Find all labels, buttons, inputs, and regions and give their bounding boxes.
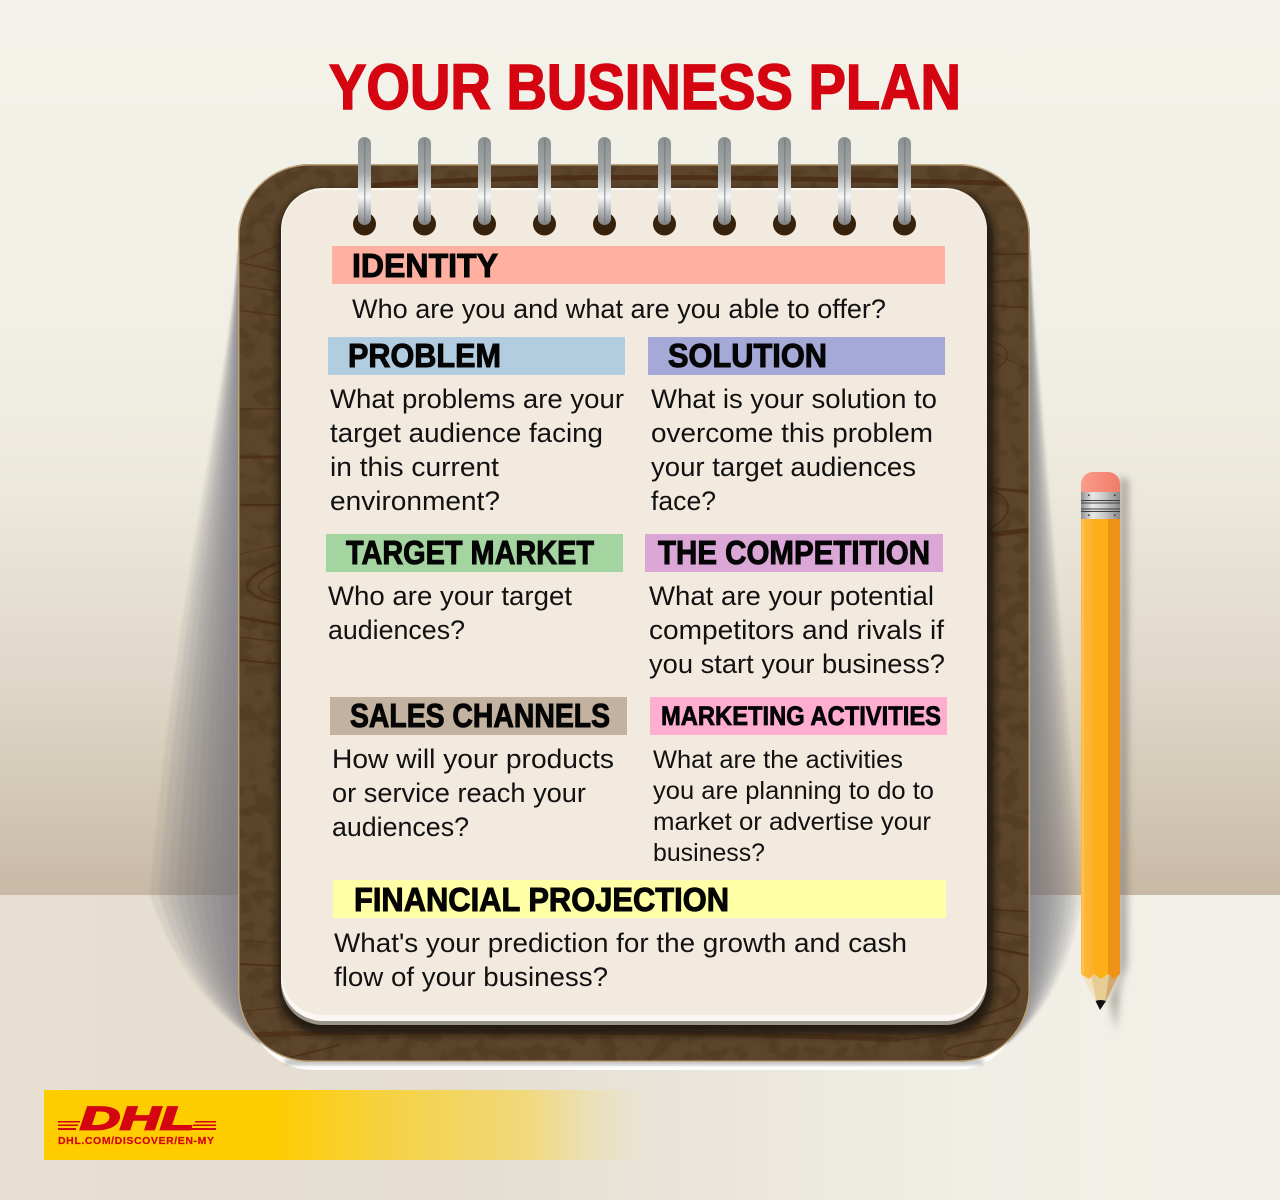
section: identity: Who are you and what are you able to offer?	[352, 294, 886, 324]
footer banner	[44, 1090, 650, 1160]
section: marketing activities: you are planning to do to	[653, 777, 934, 805]
notebook paper	[278, 188, 994, 1034]
section: solution: SOLUTION	[668, 337, 827, 374]
section: marketing activities: market or advertise your	[653, 808, 931, 836]
section: the competition	[645, 534, 945, 679]
section: problem: in this current	[330, 452, 500, 482]
section: the competition: you start your business?	[649, 649, 945, 679]
section: sales channels: SALES CHANNELS	[350, 697, 610, 734]
section: solution: overcome this problem	[651, 418, 933, 448]
section: sales channels: or service reach your	[332, 778, 586, 808]
section: problem	[328, 337, 625, 516]
section: target market: TARGET MARKET	[346, 534, 594, 571]
section: marketing activities: MARKETING ACTIVITIES	[661, 701, 941, 731]
section: problem: What problems are your	[330, 384, 624, 414]
section: problem: environment?	[330, 486, 500, 516]
section: target market: audiences?	[328, 615, 465, 645]
section: target market	[326, 534, 623, 645]
section: the competition: THE COMPETITION	[658, 534, 930, 571]
section: marketing activities: business?	[653, 839, 765, 867]
notebook wooden backing board	[238, 164, 1030, 1062]
section: identity: IDENTITY	[352, 247, 498, 284]
notebook shadows	[150, 250, 1082, 1070]
section: financial projection: flow of your business?	[334, 962, 608, 992]
title: YOUR BUSINESS PLAN	[329, 51, 961, 123]
section: sales channels: How will your products	[332, 744, 614, 774]
background: wall	[0, 0, 1280, 895]
spiral binding rings	[353, 137, 916, 236]
section: solution	[648, 337, 945, 516]
DHL logo: DHL	[80, 1100, 194, 1136]
DHL logo	[58, 1100, 216, 1136]
section: identity	[332, 246, 945, 324]
section: marketing activities	[650, 697, 947, 867]
section: the competition: competitors and rivals if	[649, 615, 945, 645]
section: financial projection	[333, 880, 946, 992]
section: financial projection: FINANCIAL PROJECTION	[354, 881, 729, 918]
section: solution: face?	[651, 486, 716, 516]
section: marketing activities: What are the activities	[653, 746, 903, 774]
section: sales channels: audiences?	[332, 812, 469, 842]
section: the competition: What are your potential	[649, 581, 934, 611]
section: target market: Who are your target	[328, 581, 572, 611]
section: problem: PROBLEM	[348, 337, 501, 374]
footer URL: DHL.COM/DISCOVER/EN-MY	[58, 1135, 214, 1147]
section: problem: target audience facing	[330, 418, 603, 448]
background: table surface	[0, 895, 1280, 1200]
icon: pencil	[1081, 472, 1128, 1030]
section: sales channels	[330, 697, 627, 842]
section: solution: What is your solution to	[651, 384, 937, 414]
section: financial projection: What's your prediction for the growth and cash	[334, 928, 907, 958]
section: solution: your target audiences	[651, 452, 916, 482]
